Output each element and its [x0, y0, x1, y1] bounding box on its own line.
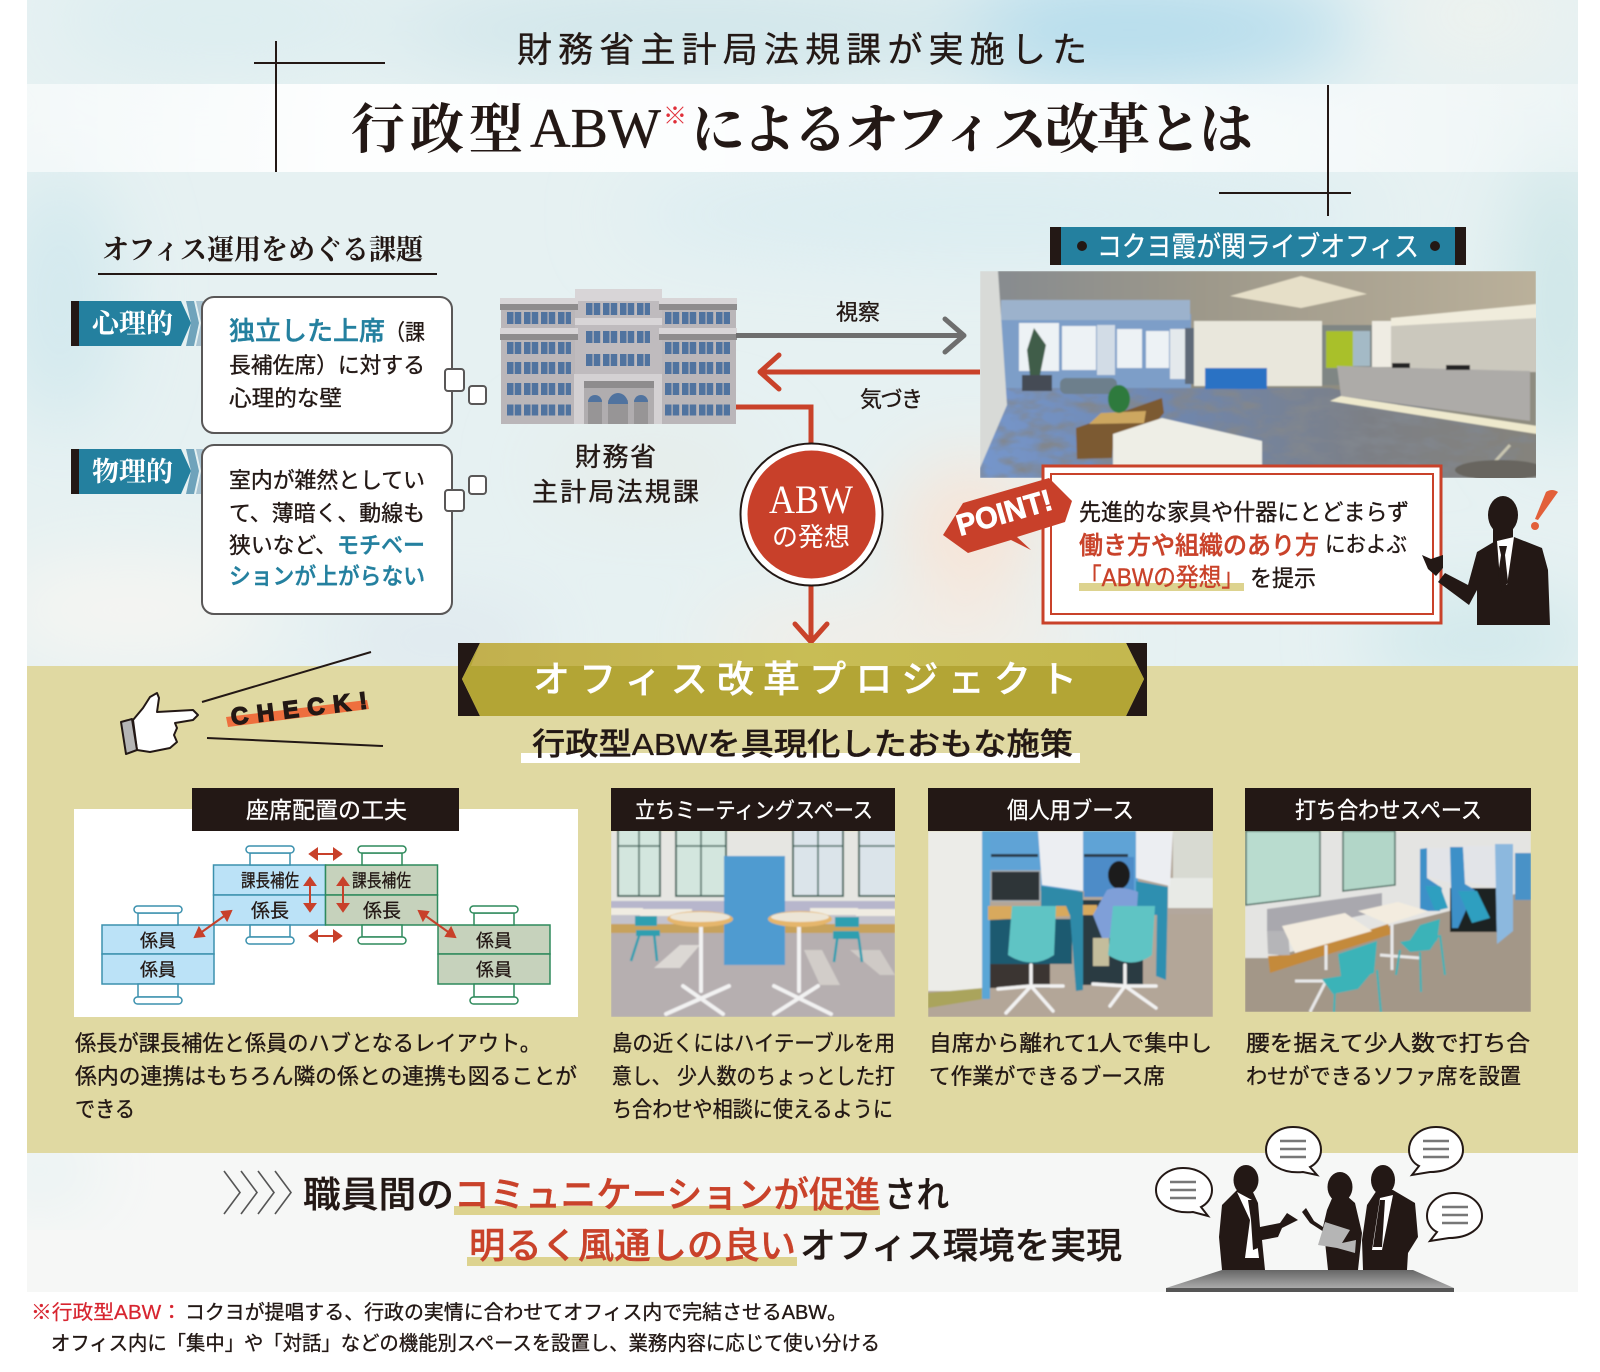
- caption: seating layout: 係長が課長補佐と係員のハブとなるレイアウト。: [75, 1031, 541, 1056]
- text box: physical issue: 室内が雑然としてい: [229, 468, 425, 493]
- panel: seating layout: [74, 788, 578, 1122]
- background: bottom result band: [27, 1153, 1578, 1292]
- tag: psychological: [71, 301, 208, 346]
- caption: personal booth: 自席から離れて1人で集中し: [929, 1031, 1212, 1056]
- diagram: desks and chairs: 課長補佐: [352, 871, 411, 891]
- badge: ABW idea: ABW: [769, 477, 853, 522]
- header: personal booth: [928, 788, 1213, 831]
- header: meeting space: [1245, 788, 1531, 831]
- point box: におよぶ: [1325, 532, 1407, 557]
- header: personal booth: 個人用ブース: [1007, 797, 1134, 823]
- ribbon: office reform project: オフィス改革プロジェクト: [533, 659, 1077, 700]
- footnote: コクヨが提唱する、行政の実情に合わせてオフィス内で完結させるABW。: [185, 1301, 847, 1324]
- text box: psychological issue: 独立した上席: [229, 316, 385, 346]
- arrow: ABW idea to project: [795, 586, 827, 642]
- header: meeting space: 打ち合わせスペース: [1295, 797, 1482, 823]
- header: standing meeting: 立ちミーティングスペース: [635, 798, 873, 823]
- result message: コミュニケーションが促進: [454, 1174, 880, 1215]
- title: によるオフィス改革とは: [691, 87, 1253, 164]
- header: standing meeting: [611, 788, 895, 831]
- label: inspection: 視察: [836, 295, 880, 327]
- photo: booth: [928, 831, 1213, 1017]
- text box: physical issue: モチベー: [337, 532, 425, 558]
- footnote: [31, 1301, 880, 1355]
- icon: man presenting: [1422, 490, 1558, 625]
- label: ministry: 主計局法規課: [532, 472, 699, 509]
- result message: 職員間の: [303, 1174, 454, 1215]
- title: [351, 87, 1253, 164]
- title: 行政型: [351, 87, 523, 164]
- point box: [1043, 466, 1441, 623]
- caption: seating layout: [75, 1031, 577, 1122]
- caption: meeting space: [1246, 1031, 1530, 1089]
- text box: psychological issue: 心理的な壁: [229, 386, 342, 411]
- icon: table: [1166, 1270, 1454, 1292]
- diagram: desks and chairs: 係員: [140, 960, 176, 980]
- diagram: desks and chairs: 係員: [476, 960, 512, 980]
- diagram: desks and chairs: 係長: [251, 900, 289, 922]
- point box: 先進的な家具や什器にとどまらず: [1079, 499, 1409, 525]
- caption: standing meeting: 意し、 少人数のちょっとした打: [612, 1064, 895, 1089]
- background: beige project panel: [27, 666, 1578, 1153]
- header: seating layout: 座席配置の工夫: [246, 797, 407, 823]
- caption: personal booth: て作業ができるブース席: [929, 1064, 1165, 1089]
- diagram: desks and chairs: 係員: [140, 931, 176, 951]
- caption: standing meeting: ち合わせや相談に使えるように: [612, 1097, 893, 1122]
- result message: 明るく風通しの良い: [469, 1225, 796, 1266]
- background: upper pastel panel: [0, 0, 1600, 680]
- heading: office issues: オフィス運用をめぐる課題: [102, 228, 426, 268]
- icon: speech bubbles: [1156, 1127, 1482, 1241]
- diagram: desks and chairs: [102, 846, 550, 1004]
- title: ABW: [530, 98, 661, 160]
- point box: 「ABWの発想」: [1079, 564, 1244, 592]
- title: ※: [663, 96, 687, 131]
- badge: ABW idea: [740, 444, 882, 586]
- point box: 働き方や組織のあり方: [1079, 532, 1319, 560]
- title band: [27, 84, 1578, 172]
- text box: psychological issue: 長補佐席）に対する: [229, 353, 425, 378]
- text box: physical issue: 狭いなど、: [229, 533, 337, 558]
- caption: personal booth: [929, 1031, 1212, 1089]
- photo: sofa seats: [1245, 831, 1531, 1012]
- result message: [303, 1174, 1122, 1266]
- caption: meeting space: 腰を据えて少人数で打ち合: [1246, 1031, 1530, 1056]
- diagram: desks and chairs: 係長: [363, 900, 401, 922]
- panel: personal booth: [928, 788, 1213, 1089]
- arrows: communication links: [195, 849, 455, 941]
- result message: され: [884, 1174, 949, 1215]
- text box: psychological issue: [202, 297, 486, 433]
- subheading: 行政型ABWを具現化したおもな施策: [532, 727, 1073, 762]
- decorative cross right: [1219, 85, 1351, 216]
- result message: オフィス環境を実現: [800, 1225, 1122, 1266]
- icon: ministry building: [500, 289, 737, 424]
- caption: seating layout: できる: [75, 1097, 135, 1122]
- text box: physical issue: ションが上がらない: [229, 563, 425, 589]
- text box: physical issue: [202, 445, 486, 614]
- badge: POINT: [943, 478, 1072, 553]
- text box: physical issue: て、薄暗く、動線も: [229, 501, 425, 526]
- panel: meeting space: [1245, 788, 1531, 1089]
- point box: を提示: [1250, 565, 1316, 591]
- icon: chevrons: [224, 1171, 291, 1214]
- caption: standing meeting: [612, 1031, 895, 1122]
- subtitle: 財務省主計局法規課が実施した: [517, 22, 1087, 73]
- badge: ABW idea: の発想: [772, 522, 850, 552]
- header: seating layout: [192, 788, 459, 831]
- ribbon: office reform project: [458, 643, 1147, 716]
- arrow: awareness: [760, 355, 980, 389]
- caption: standing meeting: 島の近くにはハイテーブルを用: [612, 1031, 895, 1056]
- label: CHECK: CHECK!: [229, 687, 369, 731]
- tag: psychological: 心理的: [92, 302, 173, 341]
- tag: physical: [71, 449, 208, 494]
- arrow: building to ABW idea: [736, 407, 811, 446]
- arrow: inspection: [736, 319, 964, 352]
- caption: seating layout: 係内の連携はもちろん隣の係との連携も図ることが: [75, 1064, 577, 1089]
- photo: standing tables: [611, 829, 899, 1017]
- ribbon: Kokuyo live office: コクヨ霞が関ライブオフィス: [1097, 231, 1419, 262]
- label: awareness: 気づき: [860, 382, 923, 414]
- icon: pointing hand: [121, 693, 198, 754]
- icon: business people: [1219, 1165, 1418, 1270]
- decorative cross left: [254, 41, 385, 172]
- label: ministry: [532, 437, 699, 509]
- diagram: desks and chairs: 課長補佐: [241, 871, 299, 891]
- caption: meeting space: わせができるソファ席を設置: [1246, 1064, 1521, 1089]
- label: ministry: 財務省: [575, 437, 656, 474]
- badge: POINT: POINT!: [953, 484, 1056, 543]
- tag: physical: 物理的: [92, 450, 173, 489]
- diagram: desks and chairs: 係員: [476, 931, 512, 951]
- photo: Kokuyo office lobby: [980, 271, 1545, 480]
- footnote: ※行政型ABW：: [31, 1301, 182, 1324]
- text box: psychological issue: （課: [385, 320, 425, 345]
- panel: standing meeting space: [611, 788, 899, 1122]
- check lines: [202, 652, 383, 746]
- footnote: オフィス内に「集中」や「対話」などの機能別スペースを設置し、業務内容に応じて使い分ける: [51, 1332, 880, 1355]
